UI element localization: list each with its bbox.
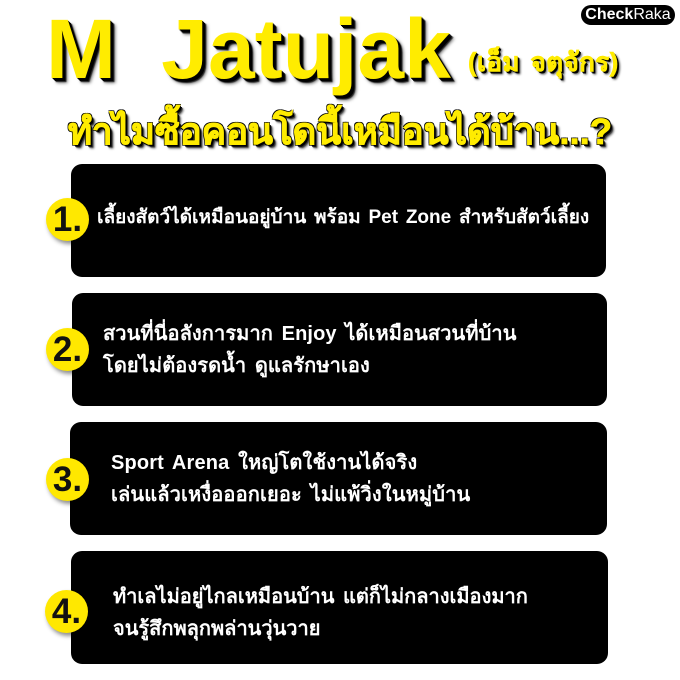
badge: number 3: 3. — [53, 460, 82, 499]
text: reason 4: จนรู้สึกพลุกพล่านวุ่นวาย — [113, 618, 320, 640]
badge: number 4 — [45, 590, 88, 633]
panel: reason 1 — [71, 164, 606, 277]
badge: number 3 — [46, 458, 89, 501]
subtitle: Thai name in brackets: (เอ็ม จตุจักร) — [468, 47, 619, 77]
panel: reason 4 — [71, 551, 608, 664]
title: M Jatujak: M Jatujak — [46, 2, 451, 96]
text: reason 2 — [102, 319, 516, 378]
text: reason 4: ทำเลไม่อยู่ไกลเหมือนบ้าน แต่ก็ไม่กลางเมืองมาก — [113, 586, 528, 608]
heading: why this condo: ทำไมซื้อคอนโดนี้เหมือนได้บ้าน...? — [68, 111, 612, 152]
badge: number 4: 4. — [52, 592, 81, 631]
badge: number 2 — [46, 328, 89, 371]
badge: number 1 — [46, 198, 89, 241]
text: reason 3 — [111, 450, 470, 506]
badge: number 2: 2. — [53, 330, 82, 369]
panel: reason 2 — [72, 293, 607, 406]
badge: number 1: 1. — [53, 200, 82, 239]
logo: CheckRaka: CheckRaka — [585, 6, 671, 23]
text: reason 1: เลี้ยงสัตว์ได้เหมือนอยู่บ้าน พร้อม Pet Zone สำหรับสัตว์เลี้ยง — [97, 207, 589, 228]
text: reason 2: สวนที่นี่อลังการมาก Enjoy ได้เหมือนสวนที่บ้าน — [103, 323, 516, 345]
text: reason 3: Sport Arena ใหญ่โตใช้งานได้จริง — [111, 452, 417, 474]
panel: reason 3 — [70, 422, 607, 535]
text: reason 3: เล่นแล้วเหงื่อออกเยอะ ไม่แพ้วิ่งในหมู่บ้าน — [111, 484, 470, 506]
text: reason 4 — [113, 584, 528, 641]
text: reason 2: โดยไม่ต้องรดน้ำ ดูแลรักษาเอง — [103, 355, 370, 377]
